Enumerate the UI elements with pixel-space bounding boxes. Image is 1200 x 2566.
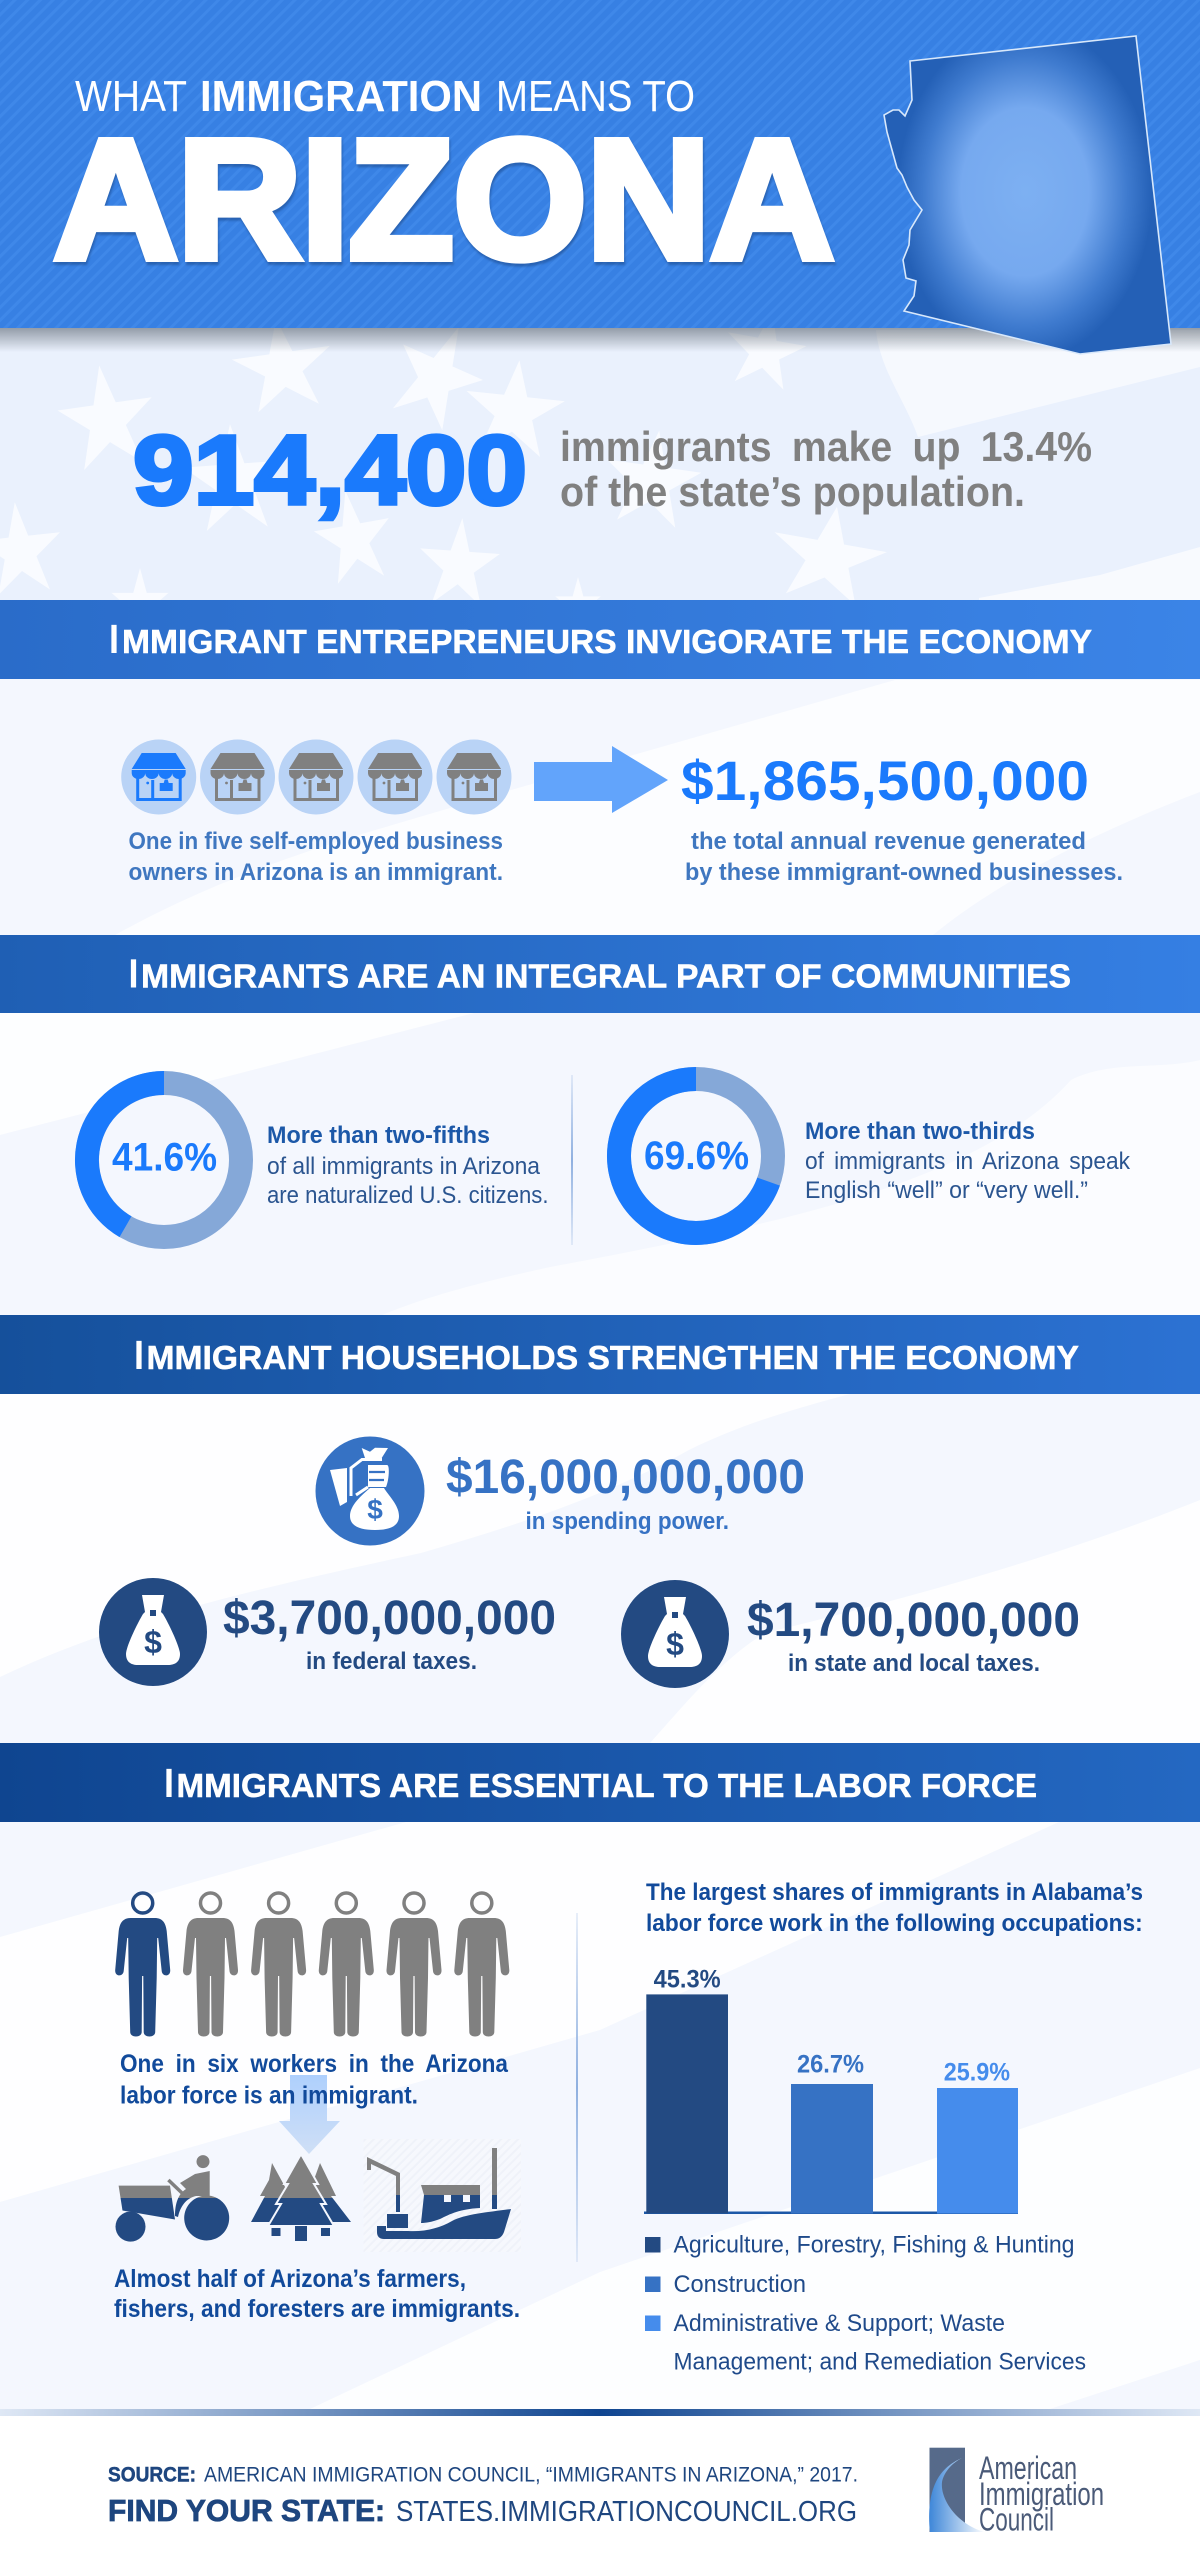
text: one in five business owners: One in five self-employed business: [128, 828, 503, 855]
chart legend: Construction: [674, 2271, 806, 2298]
chart title: labor force work in the following occupations:: [646, 1910, 1143, 1937]
text: revenue description: [685, 828, 1123, 886]
kicker: what immigration means to: WHAT: [75, 72, 187, 121]
icon: tractor: [116, 2155, 229, 2242]
text: farmers fishers foresters: [114, 2265, 520, 2323]
find your state line: STATES.IMMIGRATIONCOUNCIL.ORG: [396, 2496, 857, 2528]
icon: money bag federal: [99, 1578, 207, 1686]
text: English proficiency: [805, 1118, 1131, 1204]
text: English proficiency: of immigrants in Arizona speak: [805, 1148, 1131, 1175]
logo: American Immigration Council: [929, 2448, 1104, 2538]
text: one in six workers: labor force is an immigrant.: [120, 2082, 418, 2110]
text: revenue description: the total annual revenue generated: [691, 828, 1086, 855]
text: one in five business owners: owners in Arizona is an immigrant.: [128, 859, 503, 886]
source line: SOURCE:: [108, 2464, 196, 2487]
background stars: [0, 304, 893, 633]
federal taxes figure: $3,700,000,000: [223, 1592, 556, 1645]
donut chart: 41.6% citizens: 41.6%: [112, 1136, 217, 1180]
source line: AMERICAN IMMIGRATION COUNCIL, “IMMIGRANTS IN ARIZONA,” 2017.: [204, 2464, 858, 2487]
logo: American Immigration Council: American: [979, 2450, 1077, 2486]
kicker: what immigration means to: MEANS TO: [496, 72, 695, 121]
logo: American Immigration Council: Immigration: [979, 2476, 1104, 2512]
section band: entrepreneurs: MMIGRANT ENTREPRENEURS INVIGORATE THE ECONOMY: [122, 623, 1092, 660]
section band: labor force: MMIGRANTS ARE ESSENTIAL TO THE LABOR FORCE: [176, 1767, 1037, 1804]
section band: communities: MMIGRANTS ARE AN INTEGRAL PART OF COMMUNITIES: [141, 958, 1071, 994]
chart legend: Management; and Remediation Services: [674, 2348, 1086, 2376]
donut chart: 41.6% citizens: [87, 1083, 241, 1237]
text: farmers fishers foresters: fishers, and foresters are immigrants.: [114, 2295, 520, 2323]
arrow: down to industries: [279, 2075, 340, 2154]
federal taxes figure: [223, 1592, 556, 1675]
bar chart: occupations: 45.3%: [654, 1966, 721, 1994]
text: one in five business owners: [128, 828, 503, 886]
icon: money bag federal: $: [144, 1624, 162, 1660]
donut chart: 69.6% speak English: 69.6%: [644, 1134, 749, 1178]
section band: households: MMIGRANT HOUSEHOLDS STRENGTHEN THE ECONOMY: [146, 1339, 1079, 1376]
spending power figure: $16,000,000,000: [446, 1451, 805, 1504]
store icons: one in five: [121, 740, 511, 814]
section band: communities: [0, 935, 1200, 1013]
chart legend: [645, 2232, 1086, 2376]
header banner: [0, 0, 1200, 354]
text: naturalized citizens: More than two-fifths: [267, 1122, 490, 1149]
state and local taxes figure: $1,700,000,000: [747, 1594, 1080, 1647]
section band: households: [0, 1315, 1200, 1394]
state and local taxes figure: [747, 1594, 1080, 1677]
logo: American Immigration Council: Council: [979, 2502, 1054, 2538]
text: revenue description: by these immigrant-owned businesses.: [685, 859, 1123, 886]
icon: fishing boat: [364, 2139, 521, 2252]
text: one in six workers: [120, 2050, 509, 2110]
text: naturalized citizens: of all immigrants in Arizona: [267, 1153, 541, 1180]
text: naturalized citizens: are naturalized U.S. citizens.: [267, 1182, 548, 1209]
bar chart: occupations: 25.9%: [944, 2058, 1010, 2086]
kicker: what immigration means to: IMMIGRATION: [200, 72, 482, 121]
spending power figure: [446, 1451, 805, 1535]
icon: hand holding money bag: $: [367, 1494, 383, 1525]
section band: labor force: [0, 1743, 1200, 1822]
arrow: to revenue: [534, 746, 668, 813]
bar chart: occupations: 26.7%: [797, 2050, 864, 2078]
bar chart: occupations: [644, 1966, 1018, 2214]
chart title: The largest shares of immigrants in Alabama’s: [646, 1879, 1143, 1906]
icon: money bag state and local: [621, 1580, 729, 1688]
icon: hand holding money bag: [316, 1436, 424, 1546]
key statistic: immigrant population: [133, 415, 1092, 525]
key statistic: immigrant population: 914,400: [133, 415, 527, 525]
federal taxes figure: in federal taxes.: [306, 1648, 477, 1675]
key statistic: immigrant population: immigrants make up 13.4%: [560, 423, 1092, 470]
find your state line: FIND YOUR STATE:: [108, 2493, 385, 2528]
state and local taxes figure: in state and local taxes.: [788, 1650, 1040, 1677]
text: farmers fishers foresters: Almost half of Arizona’s farmers,: [114, 2265, 466, 2293]
text: English proficiency: More than two-thirds: [805, 1118, 1035, 1145]
chart title: [646, 1879, 1143, 1937]
people icons: one in six: [115, 1893, 509, 2036]
section band: labor force: I: [164, 1760, 174, 1806]
icon: money bag state and local: $: [666, 1626, 684, 1662]
donut chart: 69.6% speak English: [619, 1079, 773, 1233]
title: Arizona: ARIZONA: [54, 105, 834, 295]
spending power figure: in spending power.: [526, 1508, 729, 1535]
revenue figure: $1,865,500,000: [681, 749, 1089, 812]
kicker: what immigration means to: [75, 72, 695, 121]
icon: map of Arizona: [884, 36, 1171, 354]
text: naturalized citizens: [267, 1122, 548, 1209]
section band: entrepreneurs: I: [109, 616, 119, 662]
section band: communities: I: [128, 950, 138, 996]
section band: entrepreneurs: [0, 600, 1200, 679]
key statistic: immigrant population: of the state’s population.: [560, 468, 1025, 515]
chart legend: Administrative & Support; Waste: [674, 2310, 1005, 2337]
chart legend: Agriculture, Forestry, Fishing & Hunting: [674, 2232, 1074, 2259]
icon: forest trees: [251, 2154, 351, 2241]
text: one in six workers: One in six workers in the Arizona: [120, 2050, 509, 2078]
text: English proficiency: English “well” or “very well.”: [805, 1177, 1088, 1204]
find your state line: [108, 2493, 857, 2528]
section band: households: I: [134, 1332, 144, 1378]
